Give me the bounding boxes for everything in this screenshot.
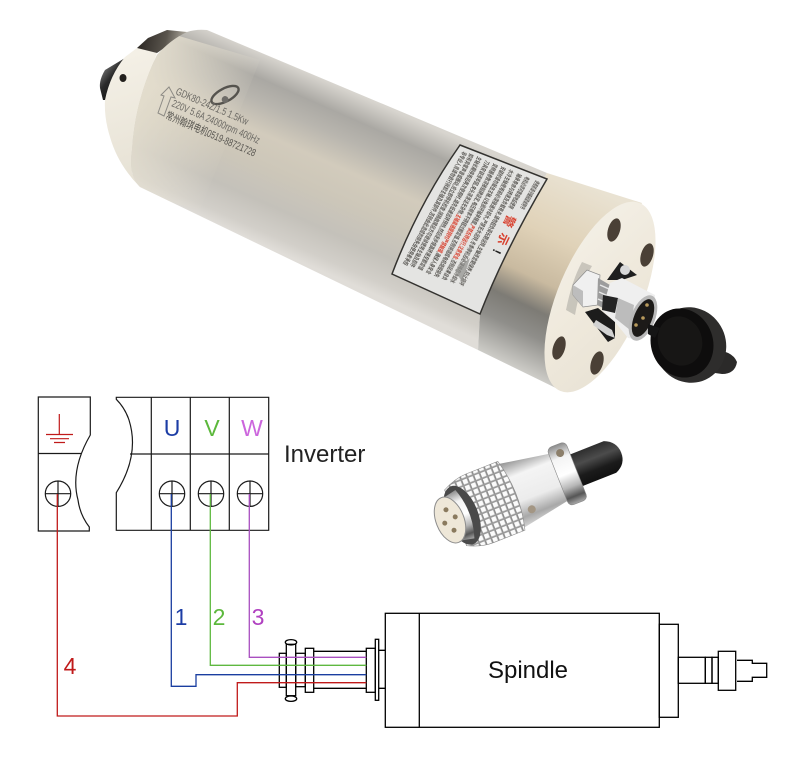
wire number 4: 4 (64, 653, 77, 679)
threaded neck (597, 278, 610, 310)
sticker lines: 主轴长期停用后再次使用时,请先低速运转预热,然后逐步提高转速至额定值 (416, 155, 483, 272)
sleeve opening (436, 481, 488, 550)
sticker lines: 变频器参数须按铭牌设定,电压频率不得超过额定值,否则将造成电机烧毁损失 (432, 162, 499, 279)
sticker lines: 电机必须可靠接地后使用 (507, 175, 531, 210)
wire 4 earth (57, 494, 366, 716)
engraved specs: 220V 5.6A 24000rpm 400Hz (170, 98, 262, 147)
aviation plug photo (423, 418, 635, 560)
engraved specs: GDK80-24Z/1.5 1.5Kw (174, 86, 250, 128)
inverter terminal block (116, 397, 269, 530)
earth terminal block (38, 397, 90, 531)
wire 3 W (249, 494, 366, 657)
sticker lines: 如有异常声音或振动,应立即停机检查,排除故障后方可继续使用主轴及部件 (408, 152, 475, 269)
knurled sleeve (442, 460, 530, 552)
black dust cap (641, 297, 737, 393)
sticker lines: 非专业人员请勿自行拆卸主轴及其部件,否则由此造成的损失由使用者承担 (401, 150, 468, 267)
inner barrel (442, 488, 479, 543)
body shading (131, 36, 247, 186)
spindle body (385, 613, 659, 727)
sticker heading: 示 (494, 231, 512, 248)
face reflection (566, 262, 592, 315)
spindle schematic (279, 613, 767, 727)
terminal screws (159, 481, 263, 506)
plug pin holes (437, 504, 463, 536)
terminal label U: U (164, 415, 180, 441)
spindle product photo (100, 20, 737, 407)
mating face (623, 291, 663, 345)
plug tapered shell (495, 444, 573, 530)
front end cap (478, 173, 642, 391)
wire 2 V (210, 494, 366, 665)
cable gland (279, 639, 385, 701)
sticker lines: 使用前请仔细阅读说明书 (518, 179, 541, 211)
plug clamp ring (547, 441, 588, 506)
wire number 2: 2 (213, 604, 225, 630)
sticker heading (490, 213, 519, 256)
main cylinder body (131, 30, 547, 350)
spindle label: Spindle (488, 657, 568, 684)
lower bracket chrome (593, 320, 615, 338)
upper bracket screw (620, 265, 630, 275)
ground symbol (46, 414, 73, 442)
rear end plate (105, 48, 157, 187)
sticker lines (401, 150, 541, 287)
hex nut (573, 270, 600, 307)
rear knob (100, 58, 125, 100)
rear dark shoulder (137, 30, 187, 53)
spindle nose (659, 624, 767, 717)
engraved arrow mark (158, 87, 175, 116)
wire number 3: 3 (252, 604, 264, 630)
connector (573, 262, 663, 345)
sticker lines: 安装时请勿敲击主轴,以免损坏轴承精度,严禁反转运行,注意安全,否则后果自负 (440, 165, 507, 282)
mounting holes (550, 217, 656, 376)
engraved specs: 常州翰琪电机0519-88721728 (164, 109, 258, 159)
wire number 1: 1 (175, 604, 187, 630)
barrel window (602, 295, 618, 313)
sticker lines: 水冷主轴使用前必须接通冷却水,严禁无水运转,冬季停机后必须排尽冷却水 (448, 168, 515, 285)
earth screw (45, 481, 71, 506)
sticker lines: 刀具安装须牢固,夹头须清洁无杂物,主轴高速旋转时严禁触摸,确保人身安全 (424, 159, 491, 276)
front face plate (521, 187, 679, 407)
clamp screw (555, 448, 565, 458)
warning sticker (392, 145, 547, 314)
inverter label: Inverter (284, 441, 365, 468)
rear screw hole (120, 74, 126, 82)
upper bracket (607, 262, 637, 280)
lower bracket (585, 308, 615, 342)
engraved specs (164, 86, 262, 159)
plug face (428, 493, 472, 547)
plug cable (569, 437, 627, 486)
main barrel (602, 278, 655, 340)
wire 1 U (171, 494, 366, 686)
terminal label W: W (241, 415, 263, 441)
sticker heading: ! (490, 247, 504, 256)
sticker heading: 警 (500, 213, 519, 230)
sticker hologram (455, 258, 470, 282)
sticker lines: 轴承寿命与转速及负载有关,请勿超负荷长期运转,主轴须定期保养,防止损坏 (457, 172, 523, 287)
engraved logo (209, 82, 242, 109)
terminal label V: V (204, 415, 220, 441)
sleeve stud (527, 504, 537, 514)
